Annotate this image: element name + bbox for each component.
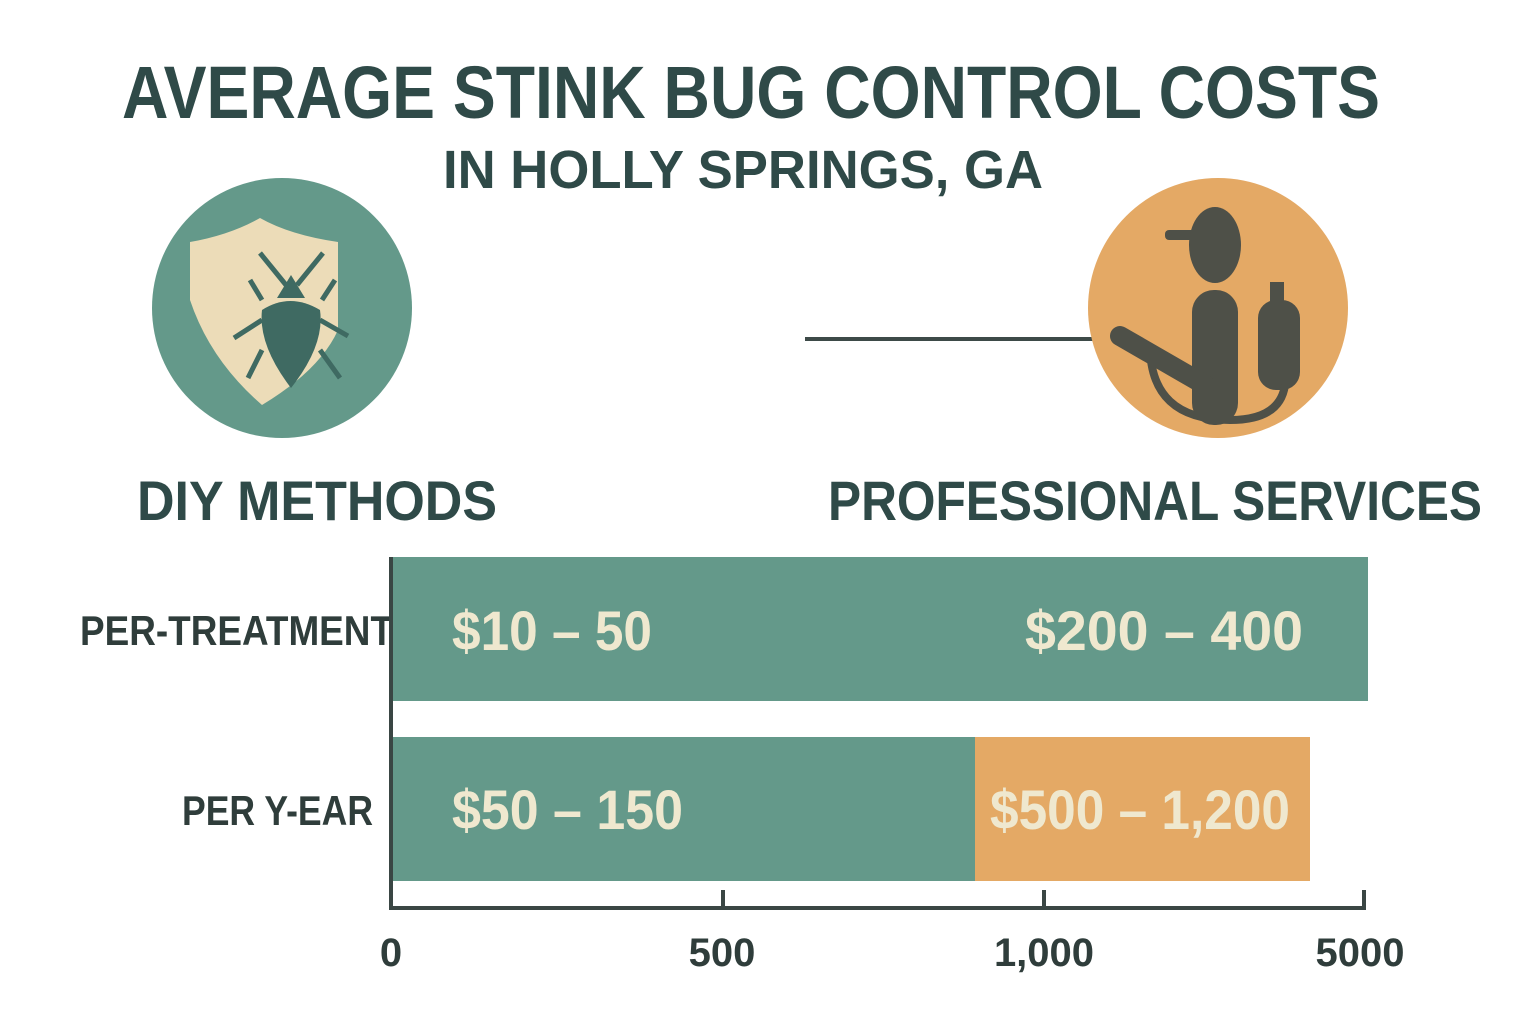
axis labels: 1,000 (994, 931, 1094, 975)
row label: per year: PER Y-EAR (182, 787, 373, 834)
axis labels: 5000 (1316, 931, 1404, 975)
bar chart (80, 557, 1404, 975)
bar: per-treatment (393, 557, 1368, 701)
arrow: spray line (805, 337, 1120, 341)
bar: per-treatment: $10 – 50 (452, 599, 652, 662)
icon: professional sprayer (1088, 178, 1348, 438)
axis labels (380, 931, 1404, 975)
axis labels: 500 (689, 931, 755, 975)
icon: DIY shield with bug (152, 178, 412, 438)
axis (389, 557, 1366, 910)
axis labels: 0 (380, 931, 402, 975)
bar: per-treatment: $200 – 400 (1025, 599, 1303, 662)
heading: DIY METHODS: DIY METHODS (137, 469, 497, 532)
bar: per year: $500 – 1,200 (990, 778, 1290, 841)
bar: per year (393, 737, 1310, 881)
title (122, 51, 1380, 200)
row label: per-treatment: PER-TREATMENT (80, 607, 393, 654)
title: AVERAGE STINK BUG CONTROL COSTS (122, 51, 1380, 134)
bar: per year: $50 – 150 (452, 778, 683, 841)
subtitle: IN HOLLY SPRINGS, GA (443, 140, 1043, 200)
